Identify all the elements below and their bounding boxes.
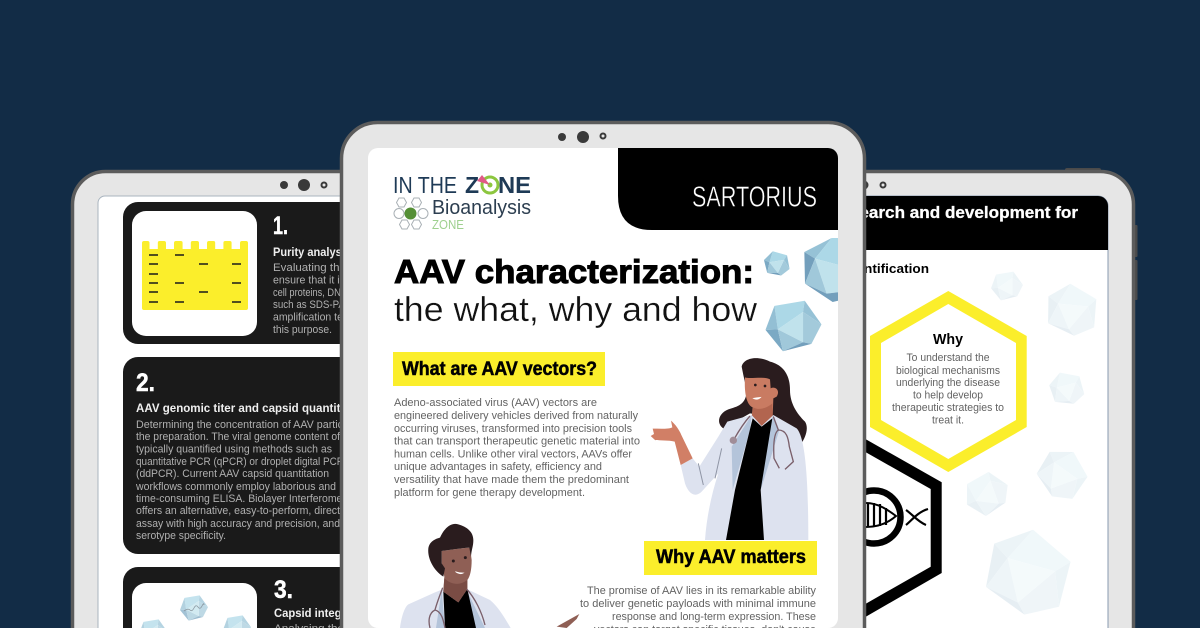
logo: in the zone: NE [498, 172, 531, 198]
pale crystals [959, 272, 1109, 628]
illustration: male doctor [400, 524, 579, 628]
text: what are AAV vectors [394, 397, 640, 499]
card 2: genomic titer and capsid quantitation: (ddPCR). Current AAV capsid quantitation [136, 468, 329, 480]
card 1: purity analysis: 1. [273, 212, 288, 240]
heading: why AAV matters [644, 541, 817, 575]
title: the what, why and how [394, 291, 757, 329]
text: what are AAV vectors: engineered delivery vehicles derived from naturally [394, 410, 638, 422]
sartorius header [618, 148, 838, 230]
card 2: genomic titer and capsid quantitation: AAV genomic titer and capsid quantitation [136, 403, 368, 415]
hexagon: why: treat it. [932, 414, 964, 426]
title: AAV characterization: [394, 253, 754, 290]
card 1: purity analysis: ensure that it is free of host [273, 274, 401, 286]
card 1: purity analysis: cell proteins, DNA and more [273, 287, 388, 299]
center tablet screen [368, 148, 840, 628]
text: why AAV matters: to deliver genetic payloads with minimal immune [580, 598, 816, 610]
text: why AAV matters: The promise of AAV lies in its remarkable ability [587, 585, 816, 597]
card 2: genomic titer and capsid quantitation: workflows commonly employ laborious and [135, 481, 336, 493]
text: why AAV matters [580, 585, 816, 628]
text: what are AAV vectors: occurring viruses, transformed into precision tools [394, 423, 632, 435]
left tablet screen [98, 196, 340, 628]
title [394, 253, 757, 329]
card 1: purity analysis: such as SDS-PAGE and [273, 299, 378, 311]
heading: target identification: Target identification [800, 261, 929, 276]
heading: what are AAV vectors [393, 352, 605, 386]
header bar: Research and development for [828, 204, 1079, 222]
card 2: genomic titer and capsid quantitation: 2. [136, 369, 155, 397]
card 3: capsid integrity [123, 567, 340, 628]
crystals [760, 238, 840, 351]
text: what are AAV vectors: platform for gene therapy development. [394, 487, 585, 499]
hexagon: how with DNA icon [800, 438, 942, 618]
card 2: genomic titer and capsid quantitation: the preparation. The viral genome content of [136, 431, 341, 443]
icon: DNA in magnifier [848, 490, 928, 544]
center tablet camera [558, 131, 606, 143]
hexagon: why [870, 291, 1027, 472]
card 1: purity analysis: Evaluating the purity of [273, 262, 391, 274]
hexagon: why: biological mechanisms [896, 365, 1000, 377]
hexagon: why: to help develop [913, 390, 983, 402]
icon: capsids [139, 595, 251, 628]
text: what are AAV vectors: human cells. Unlike other viral vectors, AAVs offer [394, 448, 632, 460]
card 1: purity analysis: amplification techniques for [273, 312, 400, 324]
text: what are AAV vectors: that can transport therapeutic genetic material into [394, 436, 640, 448]
card 2: genomic titer and capsid quantitation: assay with high accuracy and precision, and [136, 518, 340, 530]
hexagon: why: therapeutic strategies to [892, 402, 1004, 414]
header bar [866, 196, 1108, 250]
hexagon: why: Why [933, 332, 963, 348]
icon: electrophoresis gel [142, 241, 248, 310]
card 3: capsid integrity: 3. [274, 576, 293, 604]
text: why AAV matters: response and long-term expression. These [612, 611, 816, 623]
heading: why AAV matters: Why AAV matters [656, 547, 806, 568]
sartorius header: SARTORIUS [692, 180, 817, 213]
left tablet camera [280, 179, 326, 191]
logo: bioanalysis zone: Bioanalysis [432, 197, 531, 219]
card 1: purity analysis: this purpose. [273, 324, 332, 336]
right tablet camera [860, 180, 886, 190]
card 1: purity analysis [123, 202, 340, 344]
hexagon: why: underlying the disease [896, 377, 1000, 389]
card 1: purity analysis: Purity analysis [273, 247, 351, 259]
right tablet [866, 168, 1138, 628]
logo: in the zone: IN THE [393, 172, 457, 198]
card 2: genomic titer and capsid quantitation: offers an alternative, easy-to-perform, direct [136, 505, 340, 517]
center tablet [342, 122, 864, 628]
text: what are AAV vectors: Adeno-associated virus (AAV) vectors are [394, 397, 597, 409]
logo: bioanalysis zone [394, 197, 531, 232]
card 2: genomic titer and capsid quantitation: Determining the concentration of AAV particles in [136, 419, 368, 431]
text: what are AAV vectors: unique advantages in safety, efficiency and [394, 461, 602, 473]
card 2: genomic titer and capsid quantitation: time-consuming ELISA. Biolayer Interferometry [136, 493, 354, 505]
logo: in the zone: Z [465, 172, 479, 198]
heading: what are AAV vectors: What are AAV vectors? [402, 359, 597, 380]
card 3: capsid integrity: Capsid integrity [274, 608, 360, 620]
logo: bioanalysis zone: ZONE [432, 217, 464, 232]
illustration: female doctor [651, 358, 808, 540]
card 2: genomic titer and capsid quantitation: typically quantified using methods such as [136, 444, 332, 456]
left tablet [70, 170, 340, 628]
text: what are AAV vectors: versatility that have made them the predominant [394, 474, 629, 486]
card 2: genomic titer and capsid quantitation: quantitative PCR (qPCR) or droplet digital PCR [136, 456, 344, 468]
hexagon: why: To understand the [906, 352, 990, 364]
card 2: genomic titer and capsid quantitation [123, 357, 340, 554]
right tablet screen [866, 196, 1108, 628]
card 2: genomic titer and capsid quantitation: serotype specificity. [136, 530, 226, 542]
logo: in the zone [394, 175, 530, 194]
